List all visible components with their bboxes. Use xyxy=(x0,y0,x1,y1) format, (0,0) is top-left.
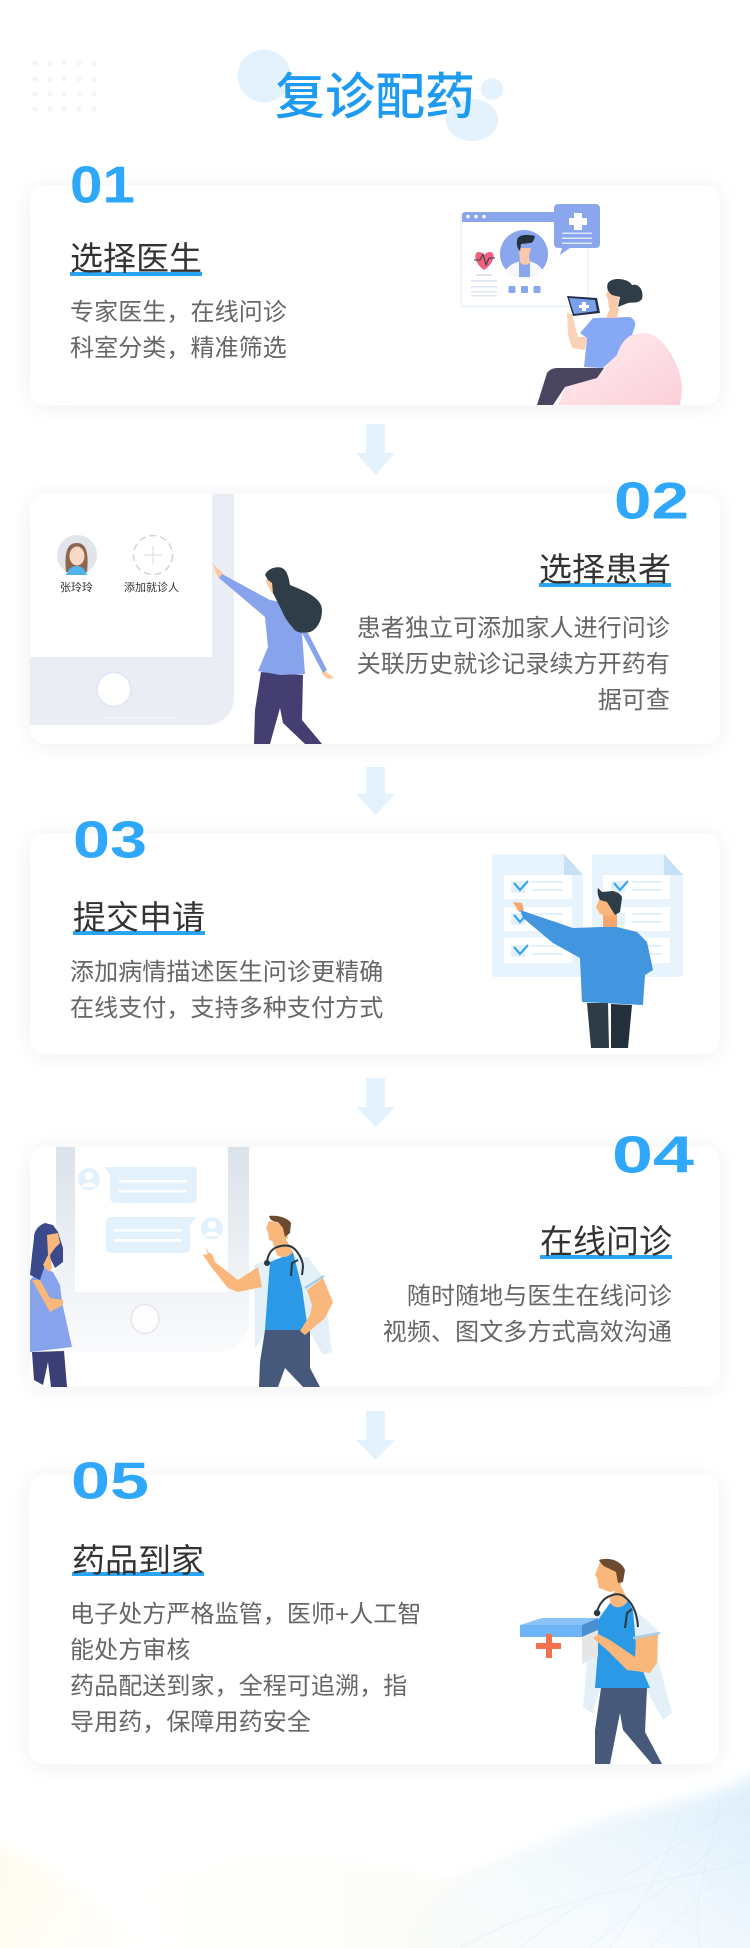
description: 药品配送到家，全程可追溯，指 xyxy=(70,1673,407,1700)
arrow 2 xyxy=(356,767,395,815)
phone mockup xyxy=(30,494,234,725)
dot pattern xyxy=(32,60,96,112)
description: 能处方审核 xyxy=(70,1637,190,1664)
description xyxy=(70,299,287,362)
add patient label: 添加就诊人 xyxy=(124,582,179,594)
illustration: woman patient xyxy=(30,1223,72,1387)
title: 复诊配药 xyxy=(275,69,475,125)
heading: 选择患者 xyxy=(539,551,671,588)
step number 03: 03 xyxy=(73,812,147,870)
description: 电子处方严格监管，医师+人工智 xyxy=(70,1601,422,1628)
description: 科室分类，精准筛选 xyxy=(70,335,287,362)
heading: 药品到家 xyxy=(72,1542,204,1579)
description: 在线支付，支持多种支付方式 xyxy=(70,995,383,1022)
illustration: man pointing at checklists xyxy=(492,854,683,1048)
panel: step 3 submit application xyxy=(30,833,720,1054)
title bubbles xyxy=(238,50,503,141)
step number 01: 01 xyxy=(70,156,135,214)
phone chat mockup xyxy=(56,1147,249,1334)
icon: add patient xyxy=(132,534,174,575)
patient name: 张玲玲 xyxy=(60,582,93,594)
description: 添加病情描述医生问诊更精确 xyxy=(70,959,383,986)
description xyxy=(70,959,383,1022)
step number 05: 05 xyxy=(71,1452,149,1510)
heading: 在线问诊 xyxy=(540,1223,672,1260)
description xyxy=(70,1601,422,1736)
description: 专家医生，在线问诊 xyxy=(70,299,287,326)
description: 据可查 xyxy=(598,687,670,714)
illustration: doctor talking xyxy=(203,1216,333,1387)
icon: patient avatar xyxy=(57,535,97,575)
step number 02: 02 xyxy=(614,472,689,530)
step number 04: 04 xyxy=(612,1126,694,1184)
panel: step 5 medicine delivered xyxy=(29,1475,719,1764)
illustration: woman pointing at phone xyxy=(213,563,334,744)
arrow 4 xyxy=(356,1411,395,1460)
decorative background waves xyxy=(0,1774,750,1948)
illustration: woman with tablet and online doctor window xyxy=(460,204,682,405)
illustration: doctor carrying medicine box xyxy=(520,1558,672,1764)
description: 关联历史就诊记录续方开药有 xyxy=(357,651,670,678)
arrow 3 xyxy=(356,1078,395,1127)
panel: step 2 choose patient xyxy=(30,494,720,744)
description: 随时随地与医生在线问诊 xyxy=(407,1283,672,1310)
description: 视频、图文多方式高效沟通 xyxy=(383,1319,672,1346)
description xyxy=(383,1283,672,1346)
description xyxy=(357,615,670,714)
heading: 提交申请 xyxy=(73,899,205,936)
description: 导用药，保障用药安全 xyxy=(70,1709,311,1736)
description: 患者独立可添加家人进行问诊 xyxy=(357,615,670,642)
panel: step 4 online consultation xyxy=(30,1147,720,1387)
heading: 选择医生 xyxy=(70,240,202,277)
panel: step 1 choose doctor xyxy=(30,185,720,405)
arrow 1 xyxy=(356,424,395,475)
